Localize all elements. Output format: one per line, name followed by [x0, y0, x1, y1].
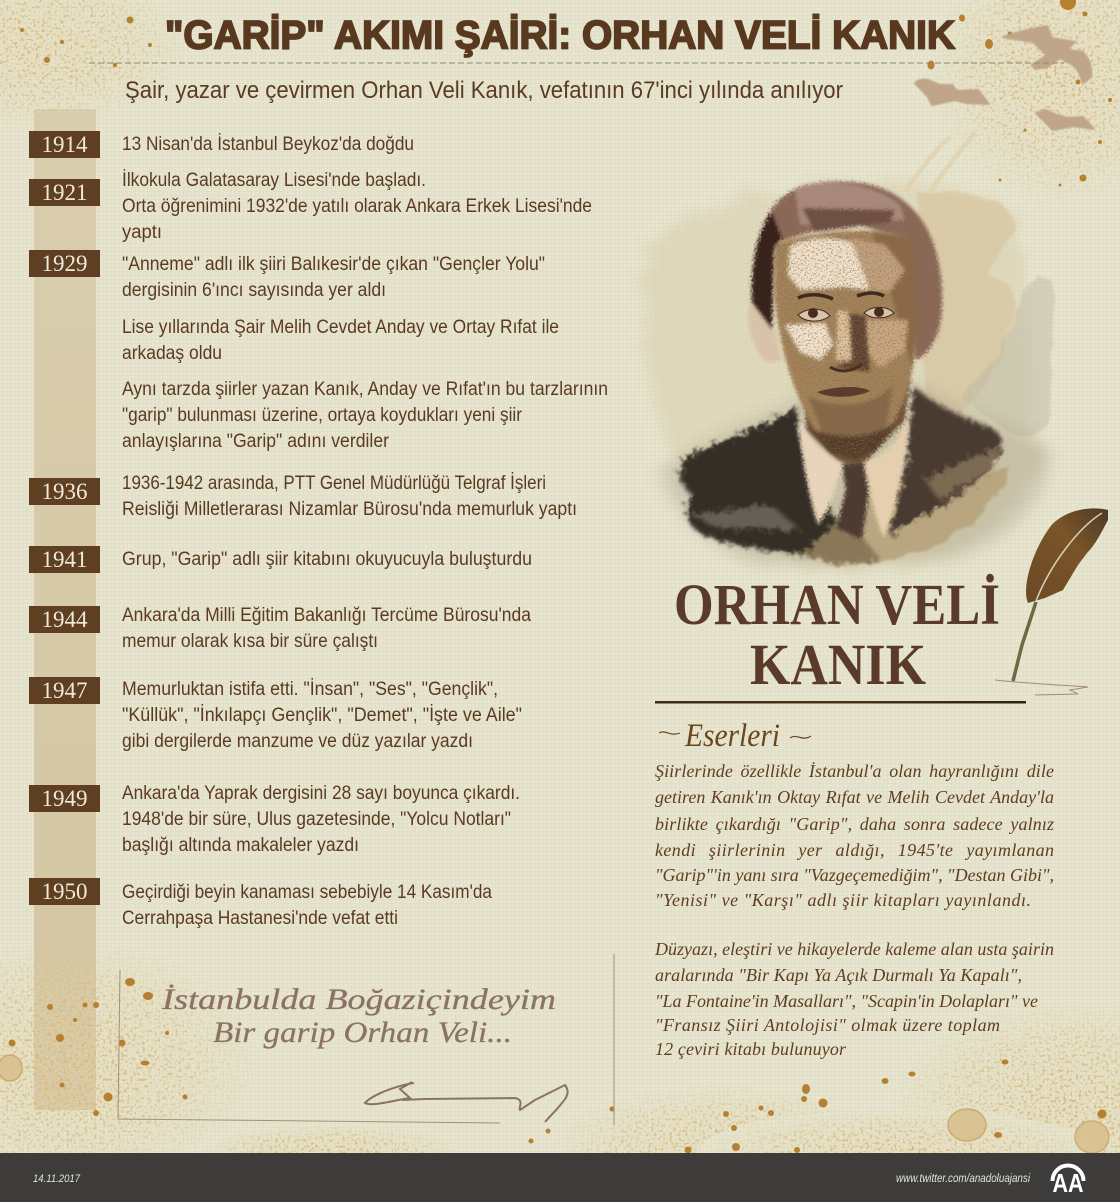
- works paragraph 1: Şiirlerinde özellikle İstanbul'a olan hayranlığını dile: [655, 761, 1054, 781]
- timeline entry: 1947: [29, 677, 522, 752]
- timeline entry: 1949: 1949: [42, 786, 88, 811]
- timeline entry: 1914: 1914: [42, 132, 88, 157]
- timeline entry: 1950: 1950: [42, 879, 88, 904]
- timeline entry: 1936: [29, 473, 577, 520]
- timeline entry: 1947: Memurluktan istifa etti. "İnsan", "Ses", "Gençlik",: [122, 679, 498, 700]
- works heading: Eserleri: Eserleri: [684, 718, 780, 754]
- works paragraph 2: [654, 939, 1054, 1059]
- works paragraph 1: kendi şiirlerinin yer aldığı, 1945'te yayımlanan: [655, 840, 1054, 860]
- works paragraph 1: [655, 761, 1054, 910]
- timeline entry: 1914: 13 Nisan'da İstanbul Beykoz'da doğdu: [122, 134, 414, 155]
- timeline entry: 1949: [29, 783, 520, 856]
- timeline entry: 1921: İlkokula Galatasaray Lisesi'nde başladı.: [122, 170, 426, 191]
- timeline entry: 1936: 1936-1942 arasında, PTT Genel Müdürlüğü Telgraf İşleri: [122, 473, 546, 494]
- timeline entry: 1914: [29, 131, 414, 158]
- timeline entry: 1944: memur olarak kısa bir süre çalıştı: [122, 631, 378, 652]
- timeline entry: 1949: 1948'de bir süre, Ulus gazetesinde, "Yolcu Notları": [122, 809, 511, 830]
- ear and hair: [748, 181, 942, 363]
- heading rule: [655, 701, 1026, 704]
- works paragraph 2: aralarında "Bir Kapı Ya Açık Durmalı Ya Kapalı",: [655, 965, 1022, 985]
- subtitle: Şair, yazar ve çevirmen Orhan Veli Kanık, vefatının 67'inci yılında anılıyor: [125, 77, 843, 104]
- timeline entry: 1921: 1921: [42, 180, 88, 205]
- timeline entry: 1947: gibi dergilerde manzume ve düz yazılar yazdı: [122, 731, 473, 752]
- facial grain and features: [770, 230, 920, 460]
- timeline entry: 1929: anlayışlarına "Garip" adını verdiler: [122, 431, 390, 452]
- name heading: Orhan Veli Kanık: KANIK: [750, 632, 926, 697]
- timeline entry: 1949: Ankara'da Yaprak dergisini 28 sayı boyunca çıkardı.: [122, 783, 520, 804]
- timeline entry: 1936: Reisliği Milletlerarası Nizamlar Bürosu'nda memurluk yaptı: [122, 499, 577, 520]
- timeline entry: 1941: [29, 546, 532, 573]
- title divider: [89, 62, 1064, 64]
- works paragraph 2: Düzyazı, eleştiri ve hikayelerde kaleme alan usta şairin: [654, 939, 1054, 959]
- timeline entry: 1949: başlığı altında makaleler yazdı: [122, 835, 359, 856]
- timeline entry: 1941: Grup, "Garip" adlı şiir kitabını okuyucuyla buluşturdu: [122, 549, 532, 570]
- handwritten note with frame and signature: Bir garip Orhan Veli...: [213, 1016, 512, 1049]
- works paragraph 2: "Fransız Şiiri Antolojisi" olmak üzere toplam: [655, 1015, 1000, 1035]
- works paragraph 2: "La Fontaine'in Masalları", "Scapin'in Dolapları" ve: [655, 991, 1038, 1011]
- timeline entry: 1944: 1944: [42, 607, 88, 632]
- timeline entry: 1921: yaptı: [122, 222, 162, 243]
- timeline entry: 1944: Ankara'da Milli Eğitim Bakanlığı Tercüme Bürosu'nda: [122, 605, 531, 626]
- handwritten note with frame and signature: [118, 954, 614, 1125]
- icon: Anadolu Agency logo: AA: [1052, 1168, 1084, 1198]
- works paragraph 1: birlikte çıkardığı "Garip", daha sonra sadece yalnız: [655, 814, 1054, 834]
- works paragraph 1: "Garip"'in yanı sıra "Vazgeçemediğim", "Destan Gibi",: [655, 865, 1054, 885]
- portrait of Orhan Veli Kanık: [640, 133, 1051, 570]
- timeline entry: 1929: arkadaş oldu: [122, 343, 222, 364]
- icon: quill feather: [995, 508, 1108, 695]
- name heading: Orhan Veli Kanık: ORHAN VELİ: [674, 572, 1000, 637]
- birds silhouette: [915, 26, 1094, 130]
- timeline entry: 1944: [29, 605, 531, 652]
- jacket: [680, 385, 1002, 565]
- date: 14.11.2017: [33, 1173, 81, 1185]
- timeline entry: 1929: dergisinin 6'ıncı sayısında yer aldı: [122, 280, 386, 301]
- footer bar: [0, 1153, 1120, 1202]
- timeline entry: 1929: "garip" bulunması üzerine, ortaya koydukları yeni şiir: [122, 405, 523, 426]
- neck, collar and tie: [798, 380, 910, 540]
- timeline entry: 1929: Aynı tarzda şiirler yazan Kanık, Anday ve Rıfat'ın bu tarzlarının: [122, 379, 608, 400]
- timeline entry: 1950: Cerrahpaşa Hastanesi'nde vefat etti: [122, 908, 398, 929]
- timeline entry: 1929: [29, 250, 608, 452]
- timeline entry: 1950: Geçirdiği beyin kanaması sebebiyle 14 Kasım'da: [122, 882, 492, 903]
- timeline entry: 1941: 1941: [42, 547, 88, 572]
- watercolour wash: [640, 133, 1051, 570]
- works paragraph 2: 12 çeviri kitabı bulunuyor: [655, 1039, 847, 1059]
- footer link: www.twitter.com/anadoluajansi: [896, 1173, 1030, 1185]
- handwritten note with frame and signature: İstanbulda Boğaziçindeyim: [161, 983, 556, 1016]
- timeline entry: 1936: 1936: [42, 479, 88, 504]
- name heading: Orhan Veli Kanık: [674, 572, 1000, 697]
- works paragraph 1: getiren Kanık'ın Oktay Rıfat ve Melih Cevdet Anday'la: [655, 787, 1054, 807]
- timeline entry: 1947: 1947: [42, 678, 88, 703]
- face: [775, 231, 917, 460]
- title: "GARİP" AKIMI ŞAİRİ: ORHAN VELİ KANIK: [165, 14, 955, 58]
- timeline entry: 1950: [29, 878, 492, 929]
- timeline entry: 1921: Orta öğrenimini 1932'de yatılı olarak Ankara Erkek Lisesi'nde: [122, 196, 592, 217]
- timeline strip: [34, 109, 96, 1110]
- timeline entry: 1921: [29, 170, 592, 243]
- timeline entry: 1947: "Küllük", "İnkılapçı Gençlik", "Demet", "İşte ve Aile": [122, 705, 522, 726]
- timeline entry: 1929: 1929: [42, 251, 88, 276]
- works paragraph 1: "Yenisi" ve "Karşı" adlı şiir kitapları yayınlandı.: [655, 890, 1031, 910]
- timeline entry: 1929: "Anneme" adlı ilk şiiri Balıkesir'de çıkan "Gençler Yolu": [122, 254, 545, 275]
- timeline entry: 1929: Lise yıllarında Şair Melih Cevdet Anday ve Ortay Rıfat ile: [122, 317, 559, 338]
